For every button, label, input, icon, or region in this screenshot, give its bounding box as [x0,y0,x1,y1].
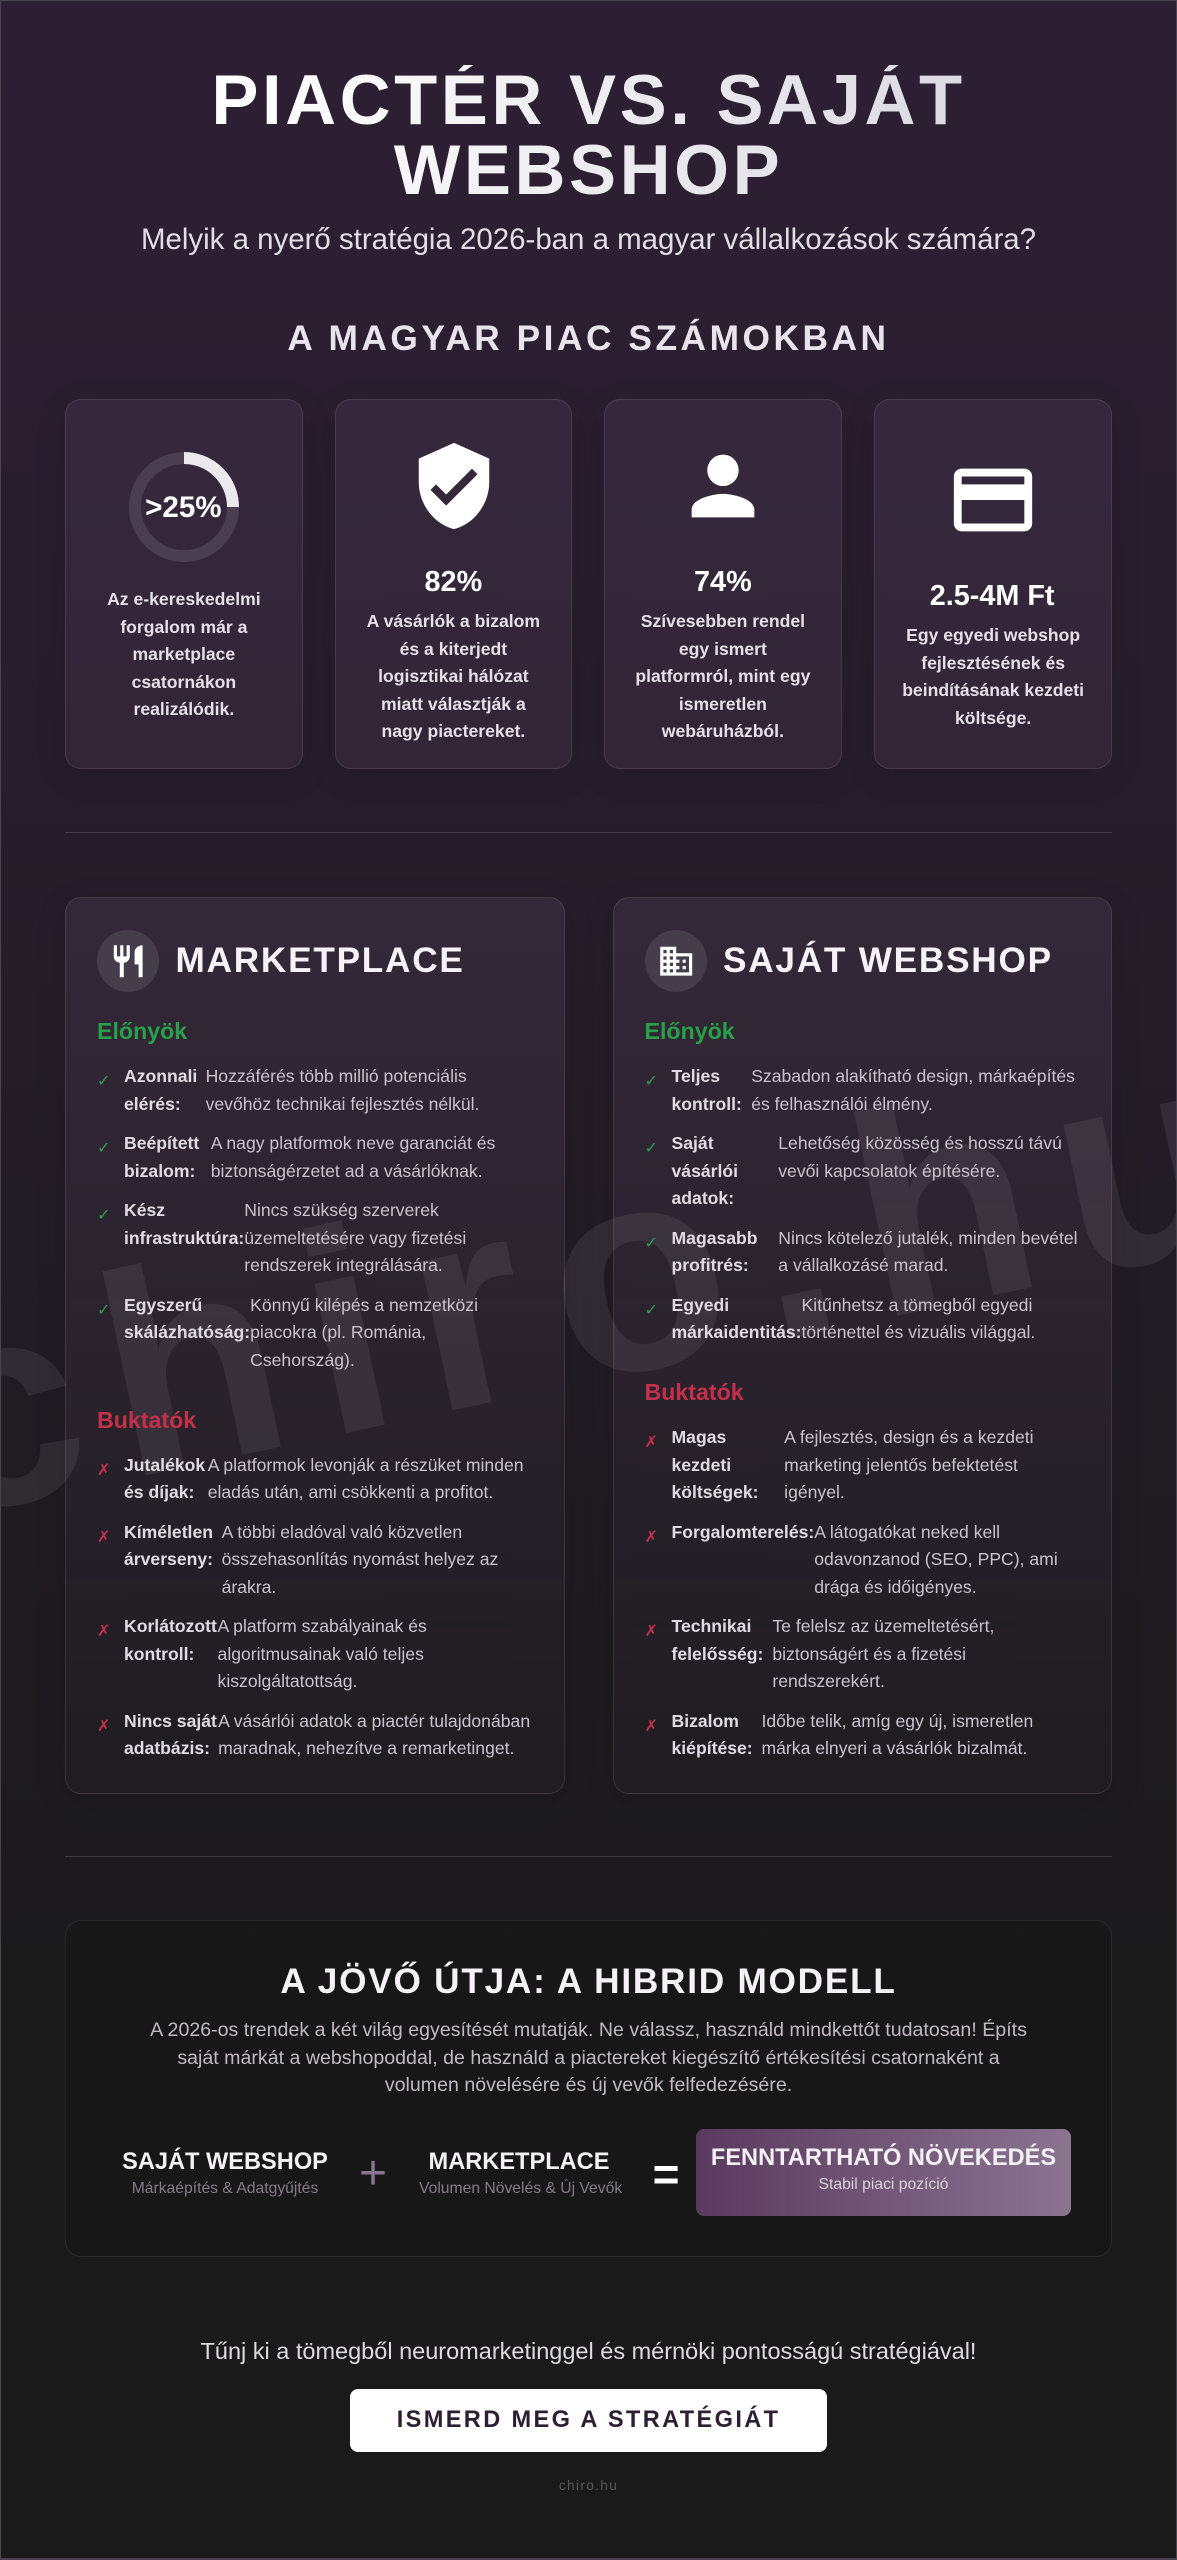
list: pitfalls: A vásárlói adatok a piactér tulajdonában maradnak, nehezítve a remarketinget. [218,1711,530,1758]
list: advantages: ✓ [97,1300,110,1318]
list: advantages: Lehetőség közösség és hosszú távú vevői kapcsolatok építésére. [778,1133,1062,1180]
list: pitfalls: Kíméletlen árverseny: [124,1522,213,1569]
stat description [367,611,540,741]
list: advantages: Saját vásárlói adatok: [672,1133,738,1208]
list: advantages: Beépített bizalom: [124,1133,199,1180]
stat description: egy ismert [679,638,767,658]
stat card: 74% [604,399,842,769]
list: pitfalls [644,1427,1058,1758]
stat description [107,589,261,719]
stat card: 82% [334,399,572,769]
call to action text: Tűnj ki a tömegből neuromarketinggel és mérnöki pontosságú stratégiával! [201,2338,976,2364]
panel heading: SAJÁT WEBSHOP [723,941,1053,980]
panel: hybrid model [65,1920,1112,2257]
icon: shield check [418,442,490,530]
equation term: marketplace [419,2149,622,2197]
stat description: forgalom már a [120,616,247,636]
list: advantages [644,1066,1078,1342]
list: pitfalls: ✗ [644,1716,658,1735]
result text: Stabil piaci pozíció [819,2176,948,2193]
list: advantages: ✓ [644,1232,658,1252]
list: advantages: ✓ [97,1205,110,1224]
stat description: nagy piactereket. [382,721,525,741]
list: advantages: Kitűnhetsz a tömegből egyedi történettel és vizuális világgal. [802,1294,1035,1342]
list: advantages: Magasabb profitrés: [672,1228,758,1275]
icon: building [644,930,707,992]
list: advantages [97,1066,495,1370]
stat description: ismeretlen [679,694,767,714]
list: advantages: Egyedi márkaidentitás: [672,1294,802,1342]
list: pitfalls: A látogatókat neked kell odavonzanod (SEO, PPC), ami drága és időigényes. [814,1522,1058,1597]
list: advantages: Szabadon alakítható design, márkaépítés és felhasználói élmény. [751,1066,1075,1114]
heading: pitfalls: Buktatók [644,1379,744,1405]
icon: restaurant [97,930,159,992]
list: pitfalls: ✗ [644,1621,658,1640]
stat description: realizálódik. [134,699,234,719]
stat card: 2.5-4M Ft [874,399,1112,769]
title: WEBSHOP [394,130,783,209]
list: advantages: ✓ [644,1138,658,1157]
stat card: 25% [65,399,303,769]
list: advantages: ✓ [97,1071,110,1090]
heading: advantages: Előnyök [644,1018,735,1044]
list: pitfalls: ✗ [97,1460,110,1479]
list: pitfalls: ✗ [97,1527,110,1546]
footer: site name: chiro.hu [559,2478,618,2493]
subtitle: Melyik a nyerő stratégia 2026-ban a magyar vállalkozások számára? [141,223,1036,256]
stat description: logisztikai hálózat [378,666,529,686]
panel: marketplace [65,897,564,1794]
button [350,2389,827,2452]
list: pitfalls: Te felelsz az üzemeltetésért, biztonságért és a fizetési rendszerekért. [772,1616,994,1691]
result box: sustainable growth [696,2129,1071,2216]
icon: person [692,454,754,518]
list: pitfalls: A fejlesztés, design és a kezdeti marketing jelentős befektetést igényel. [784,1427,1034,1502]
equation term: own webshop [122,2148,328,2197]
list: advantages: Nincs szükség szerverek üzemeltetésére vagy fizetési rendszerek integrálására. [244,1200,466,1275]
list: advantages: Teljes kontroll: [672,1066,742,1114]
hybrid description: volumen növelésére és új vevők felfedezésére. [385,2074,792,2096]
hybrid description [150,2019,1027,2096]
stat description: költsége. [955,708,1031,728]
result text: FENNTARTHATÓ NÖVEKEDÉS [711,2145,1056,2171]
stat value: 2.5-4M Ft [930,580,1055,612]
stat description: Szívesebben rendel [641,611,805,631]
panel: own webshop [612,897,1112,1794]
stat description: A vásárlók a bizalom [367,611,540,631]
list: pitfalls: ✗ [644,1432,658,1451]
list: advantages: Kész infrastruktúra: [124,1200,244,1248]
list: pitfalls: Forgalomterelés: [672,1522,814,1542]
list: pitfalls: Időbe telik, amíg egy új, ismeretlen márka elnyeri a vásárlók bizalmát. [761,1711,1033,1758]
stat description: webáruházból. [662,721,784,741]
list: advantages: Egyszerű skálázhatóság: [124,1294,250,1342]
list: pitfalls: Magas kezdeti költségek: [672,1427,759,1502]
list: advantages: ✓ [97,1138,110,1157]
list: advantages: Nincs kötelező jutalék, minden bevétel a vállalkozásé marad. [778,1228,1078,1275]
hybrid heading: A JÖVŐ ÚTJA: A HIBRID MODELL [280,1962,897,2000]
list: pitfalls: A platform szabályainak és algoritmusainak való teljes kiszolgáltatottság. [218,1616,427,1691]
stat description: Egy egyedi webshop [906,625,1080,645]
list: pitfalls: Bizalom kiépítése: [672,1711,753,1758]
hybrid description: saját márkát a webshopoddal, de használd a piactereket kiegészítő értékesítési csatornaként a [177,2046,1000,2068]
stat description: marketplace [133,644,235,664]
button: ISMERD MEG A STRATÉGIÁT [397,2407,780,2433]
stat value: 74% [694,566,752,598]
stat description: platformról, mint egy [635,666,810,686]
list: pitfalls: A platformok levonják a részüket minden eladás után, ami csökkenti a profitot. [208,1455,524,1502]
list: pitfalls: Jutalékok és díjak: [124,1455,205,1502]
stat description: és a kiterjedt [400,638,507,658]
list: pitfalls [97,1455,530,1758]
list: advantages: ✓ [644,1071,658,1090]
equals sign: = [653,2148,679,2200]
list: pitfalls: ✗ [97,1716,110,1735]
equation term: marketplace: MARKETPLACE [429,2149,609,2175]
list: pitfalls: Technikai felelősség: [672,1616,763,1664]
stat value: 82% [425,566,482,598]
stat description: fejlesztésének és [921,652,1065,672]
list: pitfalls: Korlátozott kontroll: [124,1616,217,1664]
list: pitfalls: A többi eladóval való közvetlen összehasonlítás nyomást helyez az árakra. [222,1522,498,1597]
hybrid description: A 2026-os trendek a két világ egyesítését mutatják. Ne válassz, használd mindkettőt tudatosan! Építs [150,2019,1027,2041]
stat description: Az e-kereskedelmi [107,589,261,609]
list: advantages: Hozzáférés több millió potenciális vevőhöz technikai fejlesztés nélkül. [206,1066,479,1114]
list: pitfalls: ✗ [97,1621,110,1640]
section heading: market numbers: A MAGYAR PIAC SZÁMOKBAN [287,319,890,358]
result text [711,2143,1056,2193]
title [1,65,1176,205]
stat description: csatornákon [132,672,236,692]
stat description [902,625,1084,728]
stat description: miatt választják a [381,694,526,714]
list: pitfalls: ✗ [644,1527,658,1546]
stat value: >25% [145,491,222,524]
stat description: beindításának kezdeti [902,680,1084,700]
list: advantages: A nagy platformok neve garanciát és biztonságérzetet ad a vásárlóknak. [211,1133,495,1180]
plus sign: + [359,2147,387,2200]
panel heading: MARKETPLACE [176,941,465,980]
equation term: own webshop: SAJÁT WEBSHOP [122,2149,328,2175]
heading: pitfalls: Buktatók [97,1407,196,1433]
list: advantages: Könnyű kilépés a nemzetközi piacokra (pl. Románia, Csehország). [250,1294,478,1370]
equation term: own webshop: Márkaépítés & Adatgyűjtés [132,2180,318,2197]
stat description [635,611,810,741]
heading: advantages: Előnyök [97,1018,187,1044]
list: advantages: ✓ [644,1300,658,1318]
list: pitfalls: Nincs saját adatbázis: [124,1711,217,1758]
title: PIACTÉR VS. SAJÁT [211,60,966,139]
icon: credit card [954,468,1032,532]
equation term: marketplace: Volumen Növelés & Új Vevők [419,2180,622,2197]
list: advantages: Azonnali elérés: [124,1066,197,1114]
chart: donut 25% [129,452,239,562]
